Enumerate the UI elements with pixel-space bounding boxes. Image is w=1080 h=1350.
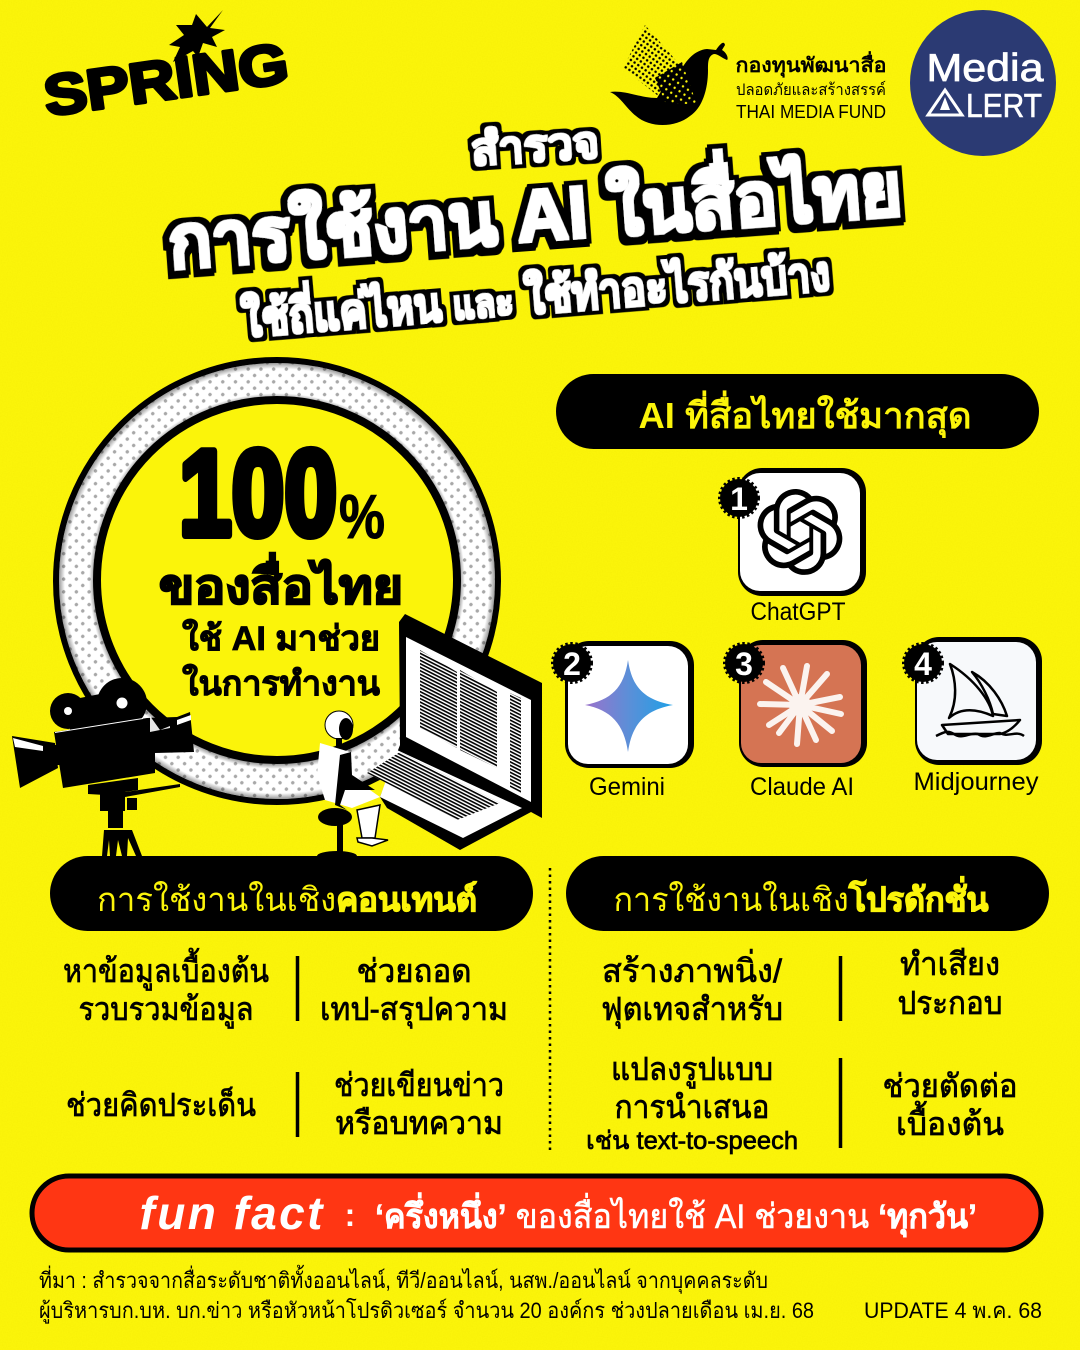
item: ช่วยถอด xyxy=(356,953,472,989)
card: ChatGPT: ChatGPT xyxy=(750,598,846,626)
stat: 100 percent: ใช้ AI มาช่วย xyxy=(182,618,380,658)
card: Gemini: Gemini xyxy=(589,773,665,801)
badge 4: 4 xyxy=(914,646,932,682)
callout: fun fact xyxy=(32,1176,1041,1250)
card: Gemini xyxy=(565,641,694,801)
logo: SPRING: SPRING xyxy=(40,31,292,129)
item: ช่วยเขียนข่าว xyxy=(334,1067,504,1103)
item: ฟุตเทจสำหรับ xyxy=(601,991,783,1029)
halftone ring xyxy=(56,360,498,802)
badge 3: 3 xyxy=(735,646,753,682)
card: Midjourney: Midjourney xyxy=(914,768,1039,796)
item: เบื้องต้น xyxy=(896,1101,1004,1142)
item: เช่น text-to-speech xyxy=(586,1127,798,1155)
badge 1: 1 xyxy=(730,481,748,517)
callout: fun fact: ‘ครึ่งหนึ่ง’ ของสื่อไทยใช้ AI ช่วยงาน ‘ทุกวัน’ xyxy=(375,1192,977,1238)
stat: 100 percent: ของสื่อไทย xyxy=(159,552,403,614)
badge 2 xyxy=(552,644,592,682)
panel: content uses xyxy=(50,856,533,1141)
logo: Thai Media Fund: ปลอดภัยและสร้างสรรค์ xyxy=(736,80,886,99)
robot xyxy=(317,711,388,861)
illustration: film camera on tripod xyxy=(12,678,194,856)
item: ช่วยคิดประเด็น xyxy=(66,1086,256,1123)
heading pill xyxy=(50,856,533,931)
panel: production uses xyxy=(566,856,1049,1155)
laptop xyxy=(367,614,542,850)
heading pill: การใช้งานในเชิงโปรดักชั่น xyxy=(614,876,989,918)
update date: UPDATE 4 พ.ค. 68 xyxy=(864,1298,1042,1323)
title: สำรวจ xyxy=(470,118,600,175)
logo: Thai Media Fund: กองทุนพัฒนาสื่อ xyxy=(736,50,886,78)
badge 4 xyxy=(904,644,942,682)
stat: 100 percent: ในการทำงาน xyxy=(182,663,380,703)
source note: ที่มา : สำรวจจากสื่อระดับชาติทั้งออนไลน์, ทีวี/ออนไลน์, นสพ./ออนไลน์ จากบุคคลระดับ xyxy=(39,1265,768,1294)
icon: halftone dove xyxy=(610,25,728,125)
badge 2: 2 xyxy=(563,646,581,682)
card: ChatGPT xyxy=(738,468,866,626)
logo: Media Alert: LERT xyxy=(966,87,1042,124)
heading pill xyxy=(556,374,1039,449)
logo: Media Alert: Media xyxy=(926,47,1044,90)
title xyxy=(165,118,905,348)
stat: 100 percent xyxy=(159,425,403,703)
stat: 100 percent: 100 xyxy=(179,425,337,561)
callout: fun fact: : xyxy=(345,1197,355,1233)
card: Claude AI: Claude AI xyxy=(750,773,854,801)
source note xyxy=(39,1265,814,1324)
item: รวบรวมข้อมูล xyxy=(78,991,254,1029)
item: การนำเสนอ xyxy=(614,1089,770,1125)
logo: Thai Media Fund xyxy=(610,25,886,125)
item: ช่วยตัดต่อ xyxy=(882,1068,1018,1104)
stat: 100 percent: % xyxy=(339,483,385,552)
panel: top AI tools xyxy=(552,374,1042,801)
card: Midjourney xyxy=(914,637,1042,796)
heading pill: AI ที่สื่อไทยใช้มากสุด xyxy=(638,390,972,439)
item: แปลงรูปแบบ xyxy=(611,1051,773,1089)
logo: Media Alert xyxy=(910,10,1056,156)
logo: Thai Media Fund: THAI MEDIA FUND xyxy=(736,102,886,122)
heading pill: การใช้งานในเชิงคอนเทนต์ xyxy=(97,881,477,918)
item: สร้างภาพนิ่ง/ xyxy=(602,949,782,989)
callout: fun fact: fun fact xyxy=(140,1187,324,1239)
item: หาข้อมูลเบื้องต้น xyxy=(63,948,269,991)
item: เทป-สรุปความ xyxy=(320,991,508,1029)
source note: ผู้บริหารบก.บห. บก.ข่าว หรือหัวหน้าโปรดิวเซอร์ จำนวน 20 องค์กร ช่วงปลายเดือน เม.ย. 68 xyxy=(39,1298,814,1324)
item: ทำเสียง xyxy=(900,946,1000,982)
item: ประกอบ xyxy=(898,985,1002,1021)
illustration: robot at laptop xyxy=(317,614,542,861)
title: การใช้งาน AI ในสื่อไทย xyxy=(165,136,905,284)
title: ใช้ถี่แค่ไหน และ ใช้ทำอะไรกันบ้าง xyxy=(239,239,832,348)
badge 3 xyxy=(724,644,764,682)
heading pill xyxy=(566,856,1049,931)
item: หรือบทความ xyxy=(335,1105,503,1141)
badge 1 xyxy=(720,478,758,518)
card: Claude AI xyxy=(739,640,867,801)
